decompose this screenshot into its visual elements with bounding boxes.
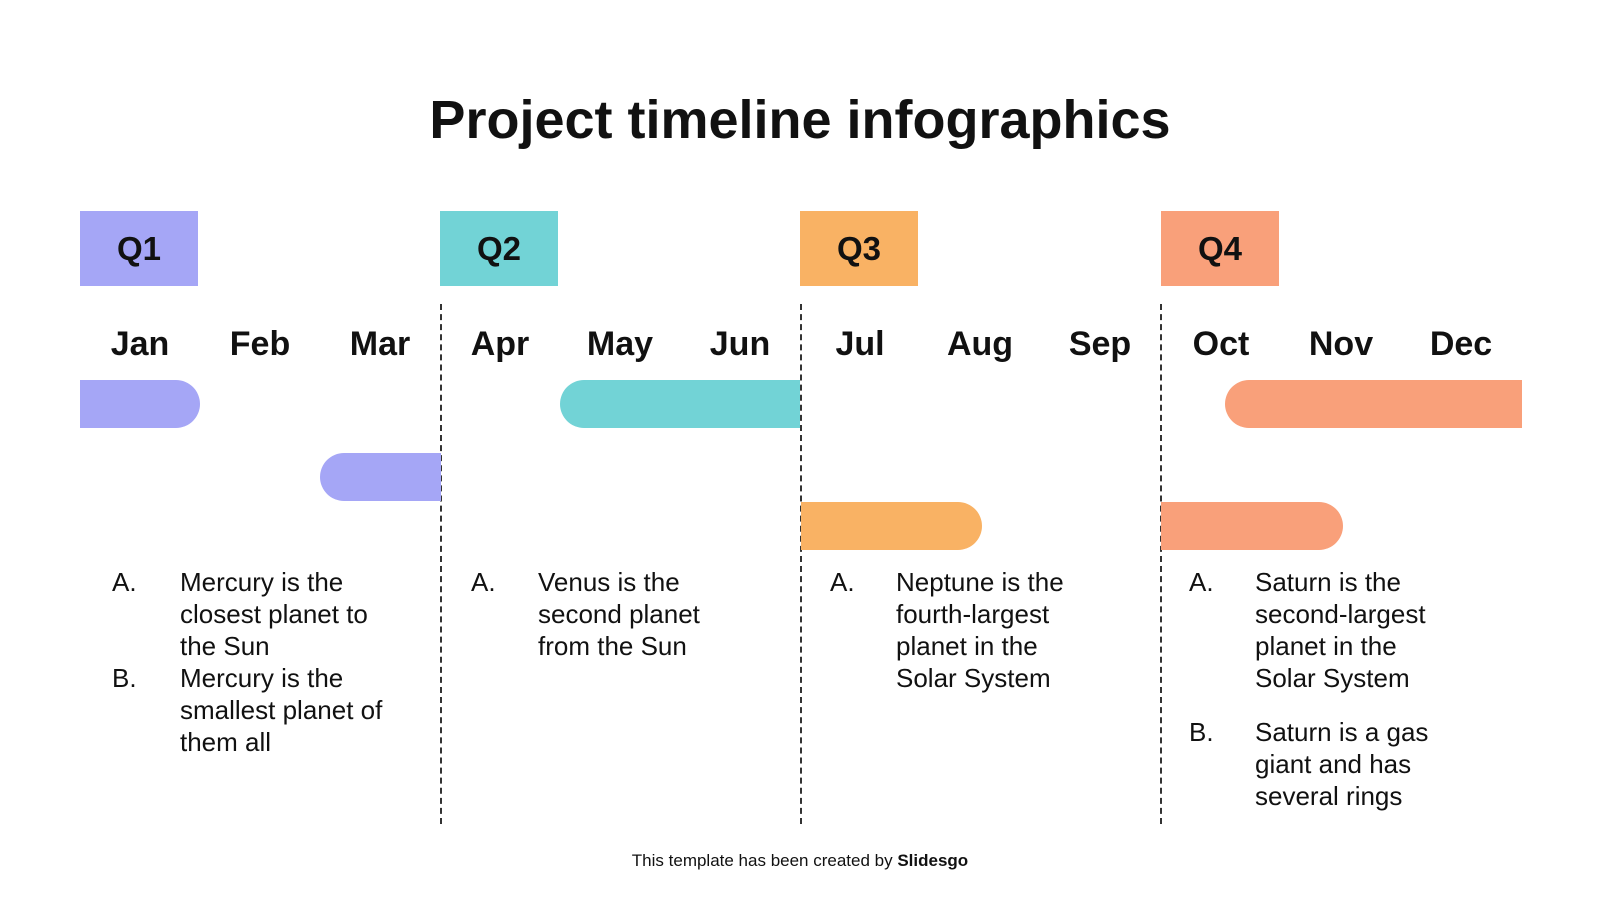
quarter label Q1 xyxy=(80,211,198,286)
month labels: Jan xyxy=(111,325,169,363)
quarter label Q3 xyxy=(800,211,918,286)
month labels: Mar xyxy=(350,325,410,363)
text Q1: B. xyxy=(112,663,137,693)
quarter label Q4 xyxy=(1161,211,1279,286)
month labels: Jun xyxy=(710,325,770,363)
quarter label Q3: Q3 xyxy=(837,230,881,266)
month labels: Apr xyxy=(471,325,529,363)
text Q4: Saturn is a gas giant and has several rings xyxy=(1255,717,1428,811)
bar Q1 Mar xyxy=(320,453,441,501)
quarter label Q4: Q4 xyxy=(1198,230,1242,266)
footer: This template has been created by Slidesgo xyxy=(632,851,968,870)
text Q1 xyxy=(112,567,382,757)
text Q4: Saturn is the second-largest planet in the Solar System xyxy=(1255,567,1426,693)
text Q3: A. xyxy=(830,567,855,597)
text Q3: Neptune is the fourth-largest planet in the Solar System xyxy=(896,567,1064,693)
month labels: Nov xyxy=(1309,325,1373,363)
month labels: Aug xyxy=(947,325,1013,363)
title: Project timeline infographics xyxy=(429,90,1171,150)
text Q1: Mercury is the closest planet to the Sun xyxy=(180,567,368,661)
bar Q3 xyxy=(801,502,982,550)
bar Q4 top xyxy=(1225,380,1522,428)
month labels: Jul xyxy=(835,325,885,363)
month labels: Feb xyxy=(230,325,290,363)
quarter label Q2 xyxy=(440,211,558,286)
text Q4: A. xyxy=(1189,567,1214,597)
quarter label Q1: Q1 xyxy=(117,230,161,266)
month labels: Oct xyxy=(1193,325,1249,363)
text Q1: A. xyxy=(112,567,137,597)
text Q1: Mercury is the smallest planet of them all xyxy=(180,663,382,757)
month labels xyxy=(111,325,1492,363)
text Q4: B. xyxy=(1189,717,1214,747)
text Q2: Venus is the second planet from the Sun xyxy=(538,567,700,661)
month labels: Sep xyxy=(1069,325,1131,363)
quarter label Q2: Q2 xyxy=(477,230,521,266)
text Q4 xyxy=(1189,567,1428,811)
month labels: May xyxy=(587,325,653,363)
bar Q1 Jan xyxy=(80,380,200,428)
bar Q2 xyxy=(560,380,800,428)
text Q2: A. xyxy=(471,567,496,597)
bar Q4 bottom xyxy=(1161,502,1343,550)
month labels: Dec xyxy=(1430,325,1492,363)
